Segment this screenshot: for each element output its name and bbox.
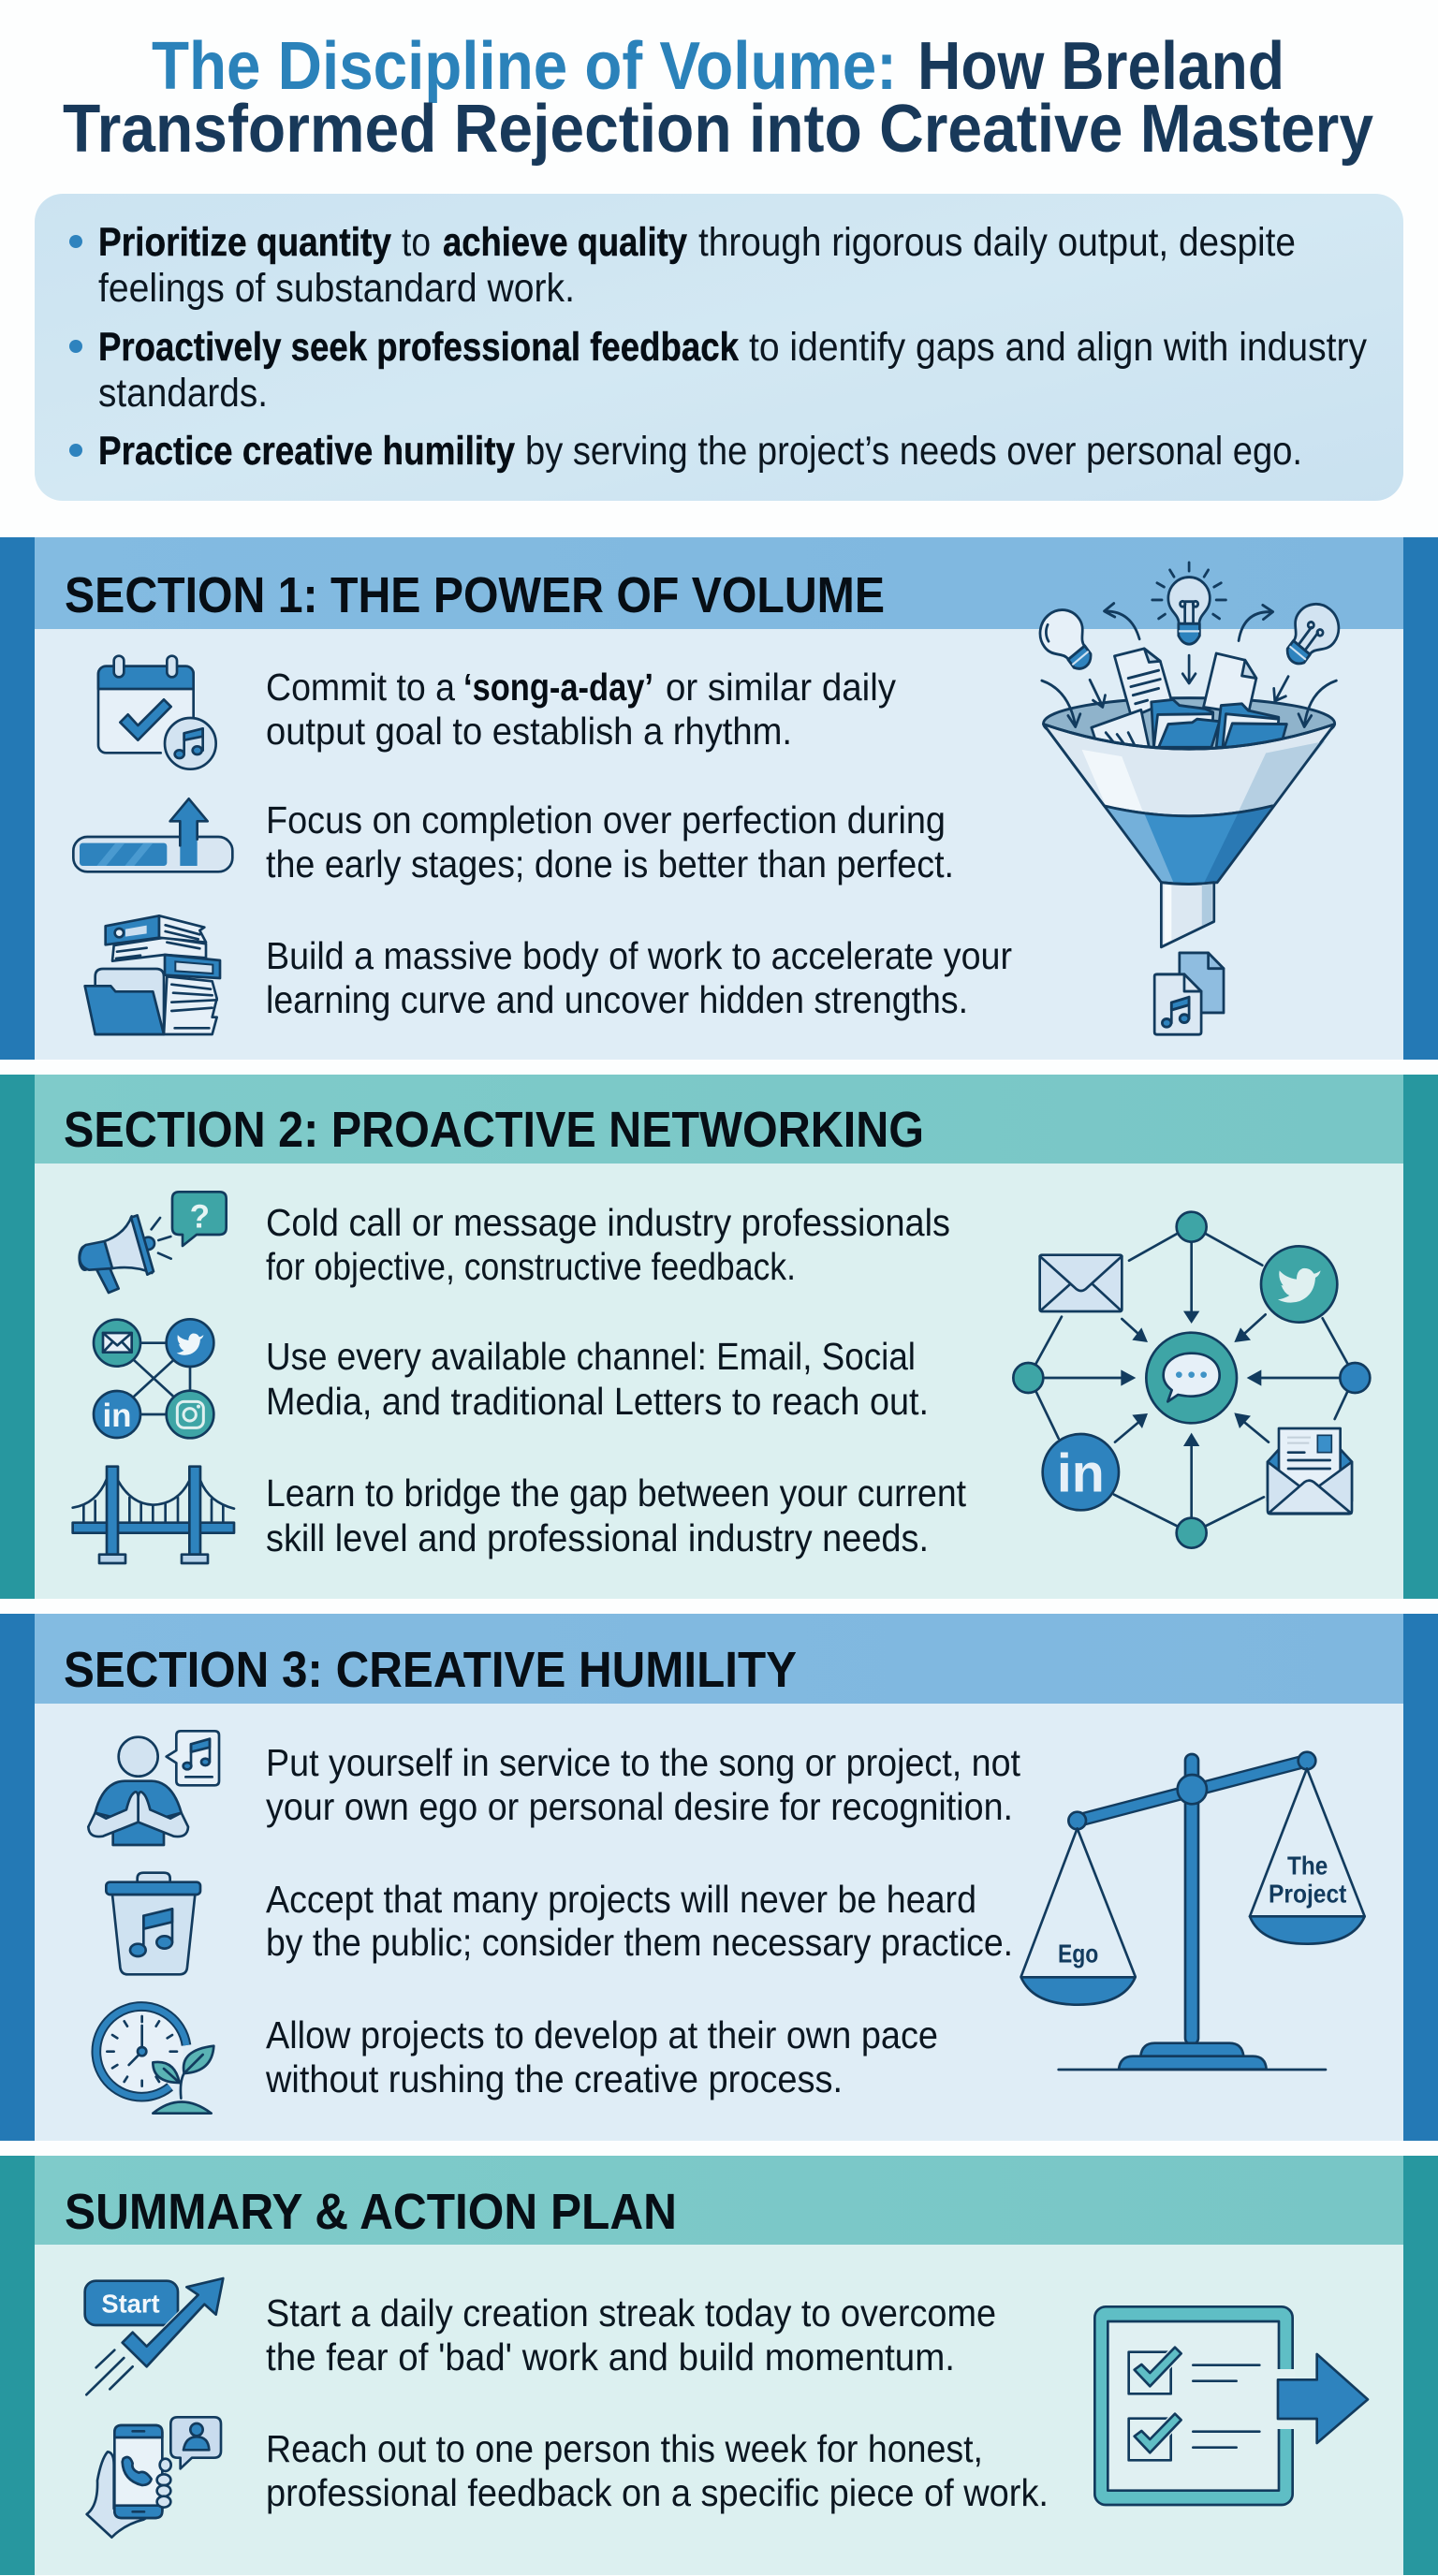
- panel: section 2: [0, 1075, 1438, 1599]
- icon: clock with sprout: [96, 2007, 213, 2114]
- panel: section 1: [0, 537, 1438, 1060]
- label: The Project: Project: [1269, 1879, 1346, 1908]
- bullet 1: through rigorous daily output, despite: [698, 220, 1296, 265]
- text: in service: Put yourself in service to the song or project, not: [266, 1741, 1021, 1784]
- text: song-a-day: output goal to establish a rhythm.: [266, 710, 792, 753]
- text: daily streak: Start a daily creation streak today to overcome: [266, 2291, 996, 2334]
- icon: start arrow: [85, 2278, 223, 2394]
- icon: folder and book stack: [85, 915, 220, 1034]
- text: daily streak: [266, 2291, 996, 2378]
- title: [63, 29, 1373, 167]
- chart: networking hub: [1013, 1212, 1370, 1548]
- heading: section 2: SECTION 2: PROACTIVE NETWORKING: [64, 1102, 924, 1158]
- text: bridge the gap: [266, 1471, 967, 1559]
- text: own pace: [265, 2013, 938, 2100]
- text: never heard: Accept that many projects will never be heard: [266, 1878, 976, 1921]
- bullet 3: Practice creative humility: [98, 429, 515, 474]
- icon: person in service to song: [88, 1731, 219, 1845]
- icon: social channels: in: [102, 1398, 132, 1434]
- bullet 1: to: [402, 220, 431, 265]
- heading: section 1: SECTION 1: THE POWER OF VOLUME: [65, 567, 885, 623]
- text: never heard: by the public; consider them necessary practice.: [266, 1921, 1013, 1964]
- icon: megaphone with question: ?: [190, 1199, 210, 1236]
- text: song-a-day: [266, 666, 896, 753]
- icon: phone in hand: [87, 2417, 221, 2538]
- chart: balance scale: [1021, 1752, 1365, 2070]
- bullet 2: Proactively seek professional feedback: [98, 325, 739, 370]
- text: song-a-day: ‘song-a-day’: [463, 666, 653, 709]
- panel: key takeaways: [35, 194, 1403, 501]
- label: The Project: [1269, 1852, 1346, 1908]
- text: song-a-day: or similar daily: [666, 666, 896, 709]
- text: reach out: professional feedback on a specific piece of work.: [266, 2471, 1049, 2514]
- text: completion: [266, 798, 954, 886]
- bullet 2: standards.: [98, 371, 268, 416]
- bullet 1: feelings of substandard work.: [98, 266, 575, 311]
- text: in service: your own ego or personal desire for recognition.: [266, 1785, 1013, 1828]
- icon: progress bar with arrow: [73, 798, 232, 871]
- icon: right bulb: [1274, 594, 1347, 676]
- text: bridge the gap: Learn to bridge the gap between your current: [266, 1471, 967, 1515]
- icon: calendar with music note: [98, 656, 216, 769]
- chart: checklist with arrow: [1094, 2306, 1368, 2505]
- icon: megaphone with question: [80, 1192, 227, 1293]
- icon: start arrow: Start: [101, 2290, 160, 2319]
- text: daily streak: the fear of 'bad' work and build momentum.: [266, 2335, 955, 2378]
- text: own pace: Allow projects to develop at their own pace: [266, 2013, 938, 2056]
- text: cold call: [266, 1201, 950, 1288]
- bullet 3: [69, 429, 1302, 474]
- label: The Project: The: [1287, 1852, 1328, 1881]
- panel: summary and action plan: [0, 2156, 1438, 2575]
- icon: bridge: [73, 1467, 234, 1563]
- arrows to hub: [1044, 1242, 1341, 1518]
- text: song-a-day: Commit to a: [266, 666, 455, 709]
- bullet 2: [69, 325, 1367, 416]
- title: The Discipline of Volume:: [152, 29, 897, 104]
- text: cold call: for objective, constructive feedback.: [266, 1245, 796, 1288]
- heading: section 3: SECTION 3: CREATIVE HUMILITY: [64, 1642, 797, 1698]
- text: channels: Use every available channel: Email, Social: [266, 1335, 916, 1378]
- text: cold call: Cold call or message industry professionals: [266, 1201, 950, 1244]
- text: body of work: learning curve and uncover hidden strengths.: [266, 978, 968, 1021]
- chart: idea funnel: [1032, 563, 1347, 1034]
- icon: left bulb: [1032, 601, 1104, 681]
- label: Ego: Ego: [1058, 1939, 1098, 1969]
- text: completion: Focus on completion over perfection during: [266, 798, 946, 842]
- bullet 1: [69, 220, 1296, 311]
- text: reach out: Reach out to one person this week for honest,: [266, 2427, 983, 2470]
- text: bridge the gap: skill level and professional industry needs.: [266, 1516, 929, 1559]
- title: How Breland: [917, 29, 1284, 104]
- text: channels: [266, 1335, 929, 1423]
- text: channels: Media, and traditional Letters to reach out.: [266, 1380, 929, 1423]
- text: body of work: Build a massive body of work to accelerate your: [266, 934, 1012, 977]
- text: completion: the early stages; done is better than perfect.: [266, 842, 954, 886]
- text: in service: [266, 1741, 1021, 1828]
- icon: centre bulb: [1152, 563, 1225, 644]
- text: never heard: [266, 1878, 1013, 1964]
- text: body of work: [266, 934, 1012, 1021]
- text: own pace: without rushing the creative process.: [265, 2057, 843, 2100]
- text: reach out: [266, 2427, 1049, 2514]
- panel: section 3: [0, 1614, 1438, 2141]
- icon: output music files: [1154, 953, 1224, 1034]
- heading: summary: SUMMARY & ACTION PLAN: [65, 2184, 677, 2240]
- icon: social channels: [94, 1319, 213, 1438]
- bullet 1: Prioritize quantity: [98, 220, 391, 265]
- chart: networking hub: in: [1057, 1443, 1105, 1503]
- bullet 1: achieve quality: [443, 220, 687, 265]
- arrows into funnel: [1042, 604, 1336, 727]
- icon: trash can with note: [106, 1873, 200, 1974]
- bullet 2: to identify gaps and align with industry: [749, 325, 1367, 370]
- bullet 3: by serving the project’s needs over personal ego.: [525, 429, 1302, 474]
